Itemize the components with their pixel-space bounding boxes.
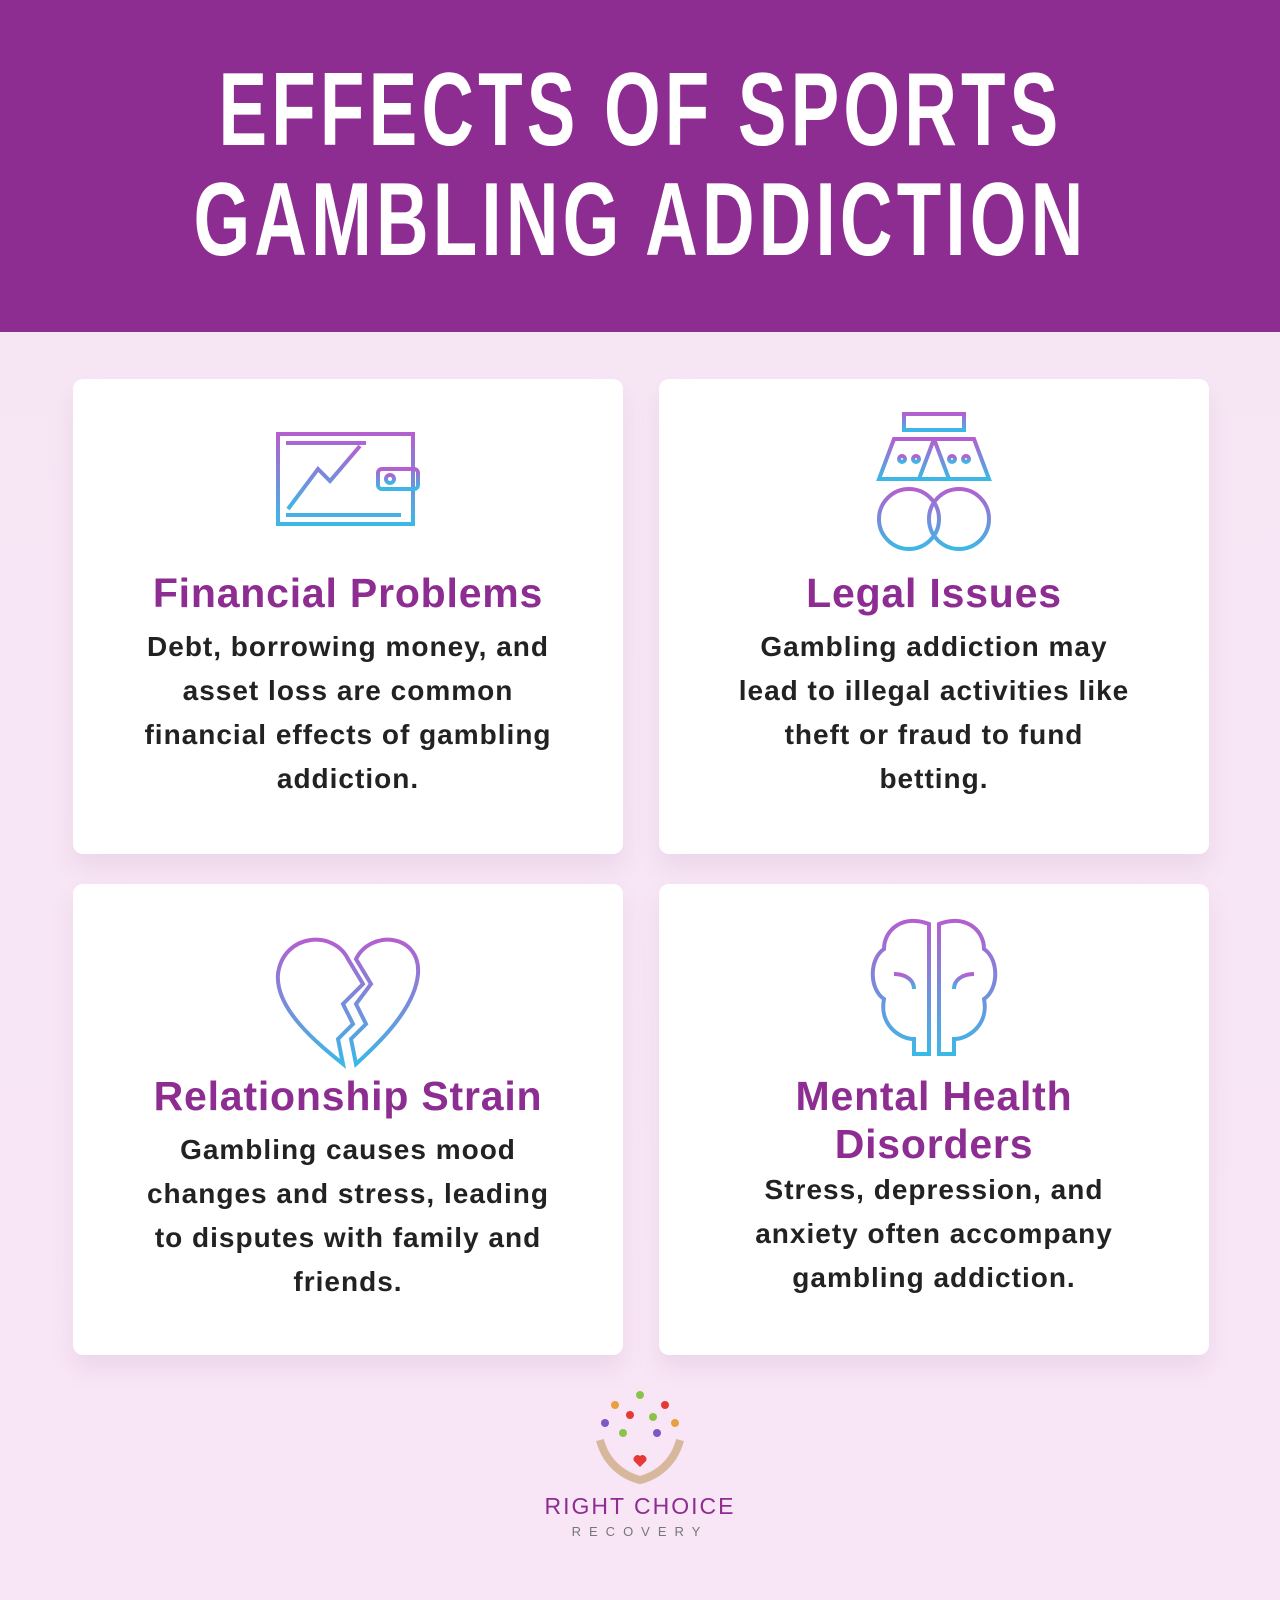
text [147,1134,549,1297]
heading: Legal Issues [806,570,1062,616]
heading: Financial Problems [153,570,543,616]
text: theft or fraud to fund [785,719,1083,750]
icon: wallet [276,432,420,526]
panel: legal [659,379,1209,854]
icon: broken heart [276,938,420,1069]
text [755,1174,1113,1293]
heading: Disorders [835,1121,1033,1167]
text: financial effects of gambling [144,719,552,750]
text: betting. [879,763,989,794]
logo [544,1391,735,1539]
text: friends. [293,1266,403,1297]
brand name: RIGHT CHOICE [544,1493,735,1519]
heading: Mental Health [796,1073,1072,1119]
text: addiction. [277,763,419,794]
header [0,0,1280,332]
text: Debt, borrowing money, and [147,631,549,662]
heading [796,1073,1072,1167]
icon: tree hands [596,1391,684,1484]
logo: RECOVERY [572,1524,708,1539]
title: GAMBLING ADDICTION [193,162,1087,278]
text: lead to illegal activities like [739,675,1129,706]
panel: financial [73,379,623,854]
heading: Relationship Strain [154,1073,542,1119]
text: gambling addiction. [792,1262,1076,1293]
text: asset loss are common [183,675,513,706]
text: Gambling addiction may [760,631,1108,662]
text [739,631,1129,794]
icon: brain [870,918,998,1056]
text: changes and stress, leading [147,1178,549,1209]
icon: handcuffs [876,412,992,551]
text: Stress, depression, and [765,1174,1103,1205]
text: Gambling causes mood [180,1134,516,1165]
text [144,631,552,794]
text: anxiety often accompany [755,1218,1113,1249]
title: EFFECTS OF SPORTS [218,52,1062,168]
panel: mental health [659,884,1209,1355]
text: to disputes with family and [155,1222,541,1253]
title [193,52,1087,278]
panel: relationship [73,884,623,1355]
